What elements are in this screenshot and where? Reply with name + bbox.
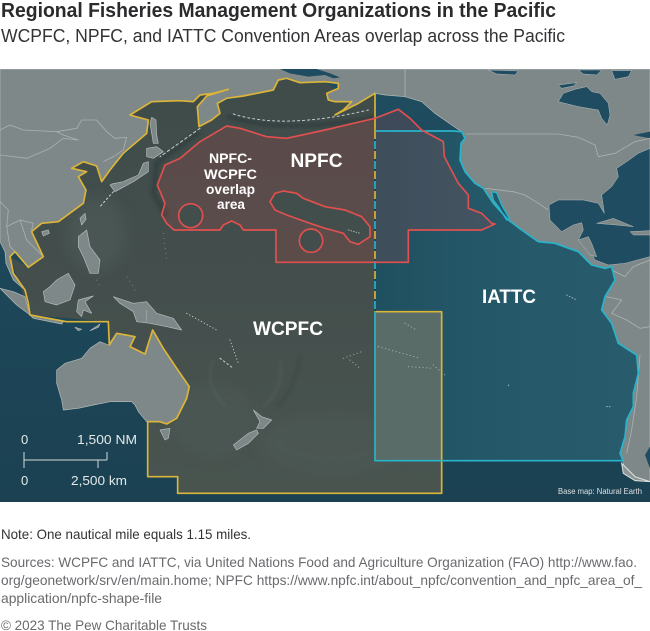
land: Australia	[57, 330, 189, 424]
sources	[1, 555, 642, 606]
Caribbean islands	[597, 218, 650, 235]
label: IATTC: IATTC	[482, 287, 536, 308]
NPFC boundary line	[157, 109, 495, 262]
land: New Guinea	[113, 297, 182, 330]
scale bar	[21, 432, 137, 488]
Gulf of California	[492, 192, 509, 220]
land: Tasmania	[160, 428, 170, 440]
label: NPFC-WCPFC overlap area: WCPFC	[204, 166, 257, 182]
Hudson Bay	[558, 87, 610, 125]
label: NPFC-WCPFC overlap area: overlap	[206, 181, 255, 197]
label: NPFC-WCPFC overlap area: NPFC-	[209, 150, 252, 166]
scale bar: 2,500 km	[71, 473, 127, 488]
inland and coastal waters	[280, 69, 650, 468]
IATTC convention area fill	[375, 131, 638, 461]
map panel	[0, 69, 650, 502]
Bering Strait waters	[280, 69, 340, 78]
Southern Chile islands	[622, 463, 650, 482]
Argentine coast water	[645, 447, 650, 468]
land: New Zealand	[233, 410, 272, 450]
land: Taiwan, Hainan and Philippines	[42, 213, 100, 273]
subtitle: WCPFC, NPFC, and IATTC Convention Areas overlap across the Pacific	[1, 26, 565, 46]
label: NPFC: NPFC	[290, 151, 343, 172]
label: NPFC-WCPFC overlap area: area	[217, 196, 245, 212]
Central America	[578, 237, 597, 257]
WCPFC boundary line	[10, 78, 442, 493]
shared WCPFC and IATTC dashed boundary	[374, 131, 376, 312]
Atlantic, Gulf of Mexico and Caribbean	[549, 148, 650, 265]
scale bar: 0	[21, 432, 28, 447]
WCPFC convention area fill	[10, 80, 442, 493]
sources: org/geonetwork/srv/en/main.home; NPFC https://www.npfc.int/about_npfc/convention_and_npfc_area_of_	[1, 573, 642, 588]
Gulf of St. Lawrence	[633, 132, 650, 138]
Aleutian, Kuril and Pacific island specks	[97, 110, 610, 407]
label: NPFC-WCPFC overlap area	[204, 154, 256, 209]
ocean texture within WCPFC	[67, 116, 407, 473]
land: Japan and Sakhalin	[110, 117, 163, 192]
Arctic waters	[488, 70, 632, 88]
scale bar: 1,500 NM	[77, 432, 137, 447]
base map credit: Base map: Natural Earth	[558, 486, 642, 496]
country borders	[0, 69, 650, 453]
land masses	[0, 69, 650, 482]
sources: Sources: WCPFC and IATTC, via United Nations Food and Agriculture Organization (FAO) http://www.fao.	[1, 555, 637, 570]
note: Note: One nautical mile equals 1.15 miles.	[1, 527, 251, 542]
land: Eurasia and the Americas	[0, 69, 650, 482]
IATTC boundary line	[375, 131, 638, 461]
WCPFC-IATTC overlap box	[375, 312, 442, 461]
land: Sumatra, Java, Borneo, Sulawesi	[0, 273, 100, 331]
label: WCPFC: WCPFC	[253, 319, 323, 340]
title: Regional Fisheries Management Organizations in the Pacific	[1, 0, 556, 22]
NPFC convention area fill with seamount holes	[157, 109, 495, 262]
scale bar: 0	[21, 473, 28, 488]
sources: application/npfc-shape-file	[1, 591, 162, 606]
